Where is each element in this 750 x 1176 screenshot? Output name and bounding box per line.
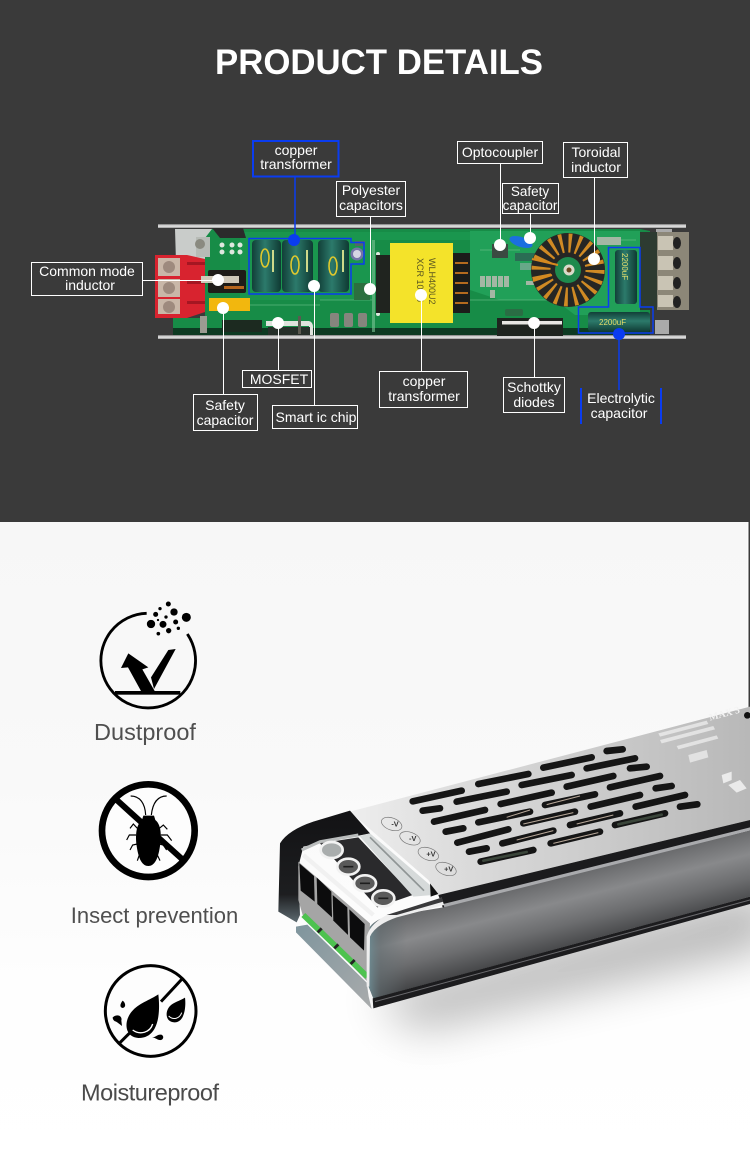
callout: optocoupler: Optocoupler [462,144,538,160]
product photo: power supply device [350,705,750,1028]
terminal end of device [278,811,444,1009]
common mode inductor part [201,270,246,293]
callout: polyester capacitors [336,182,406,295]
callout: safety capacitor bottom: Safety [205,397,245,413]
printed model text: MAX 3 [708,705,741,724]
ventilation slots [413,749,697,862]
callout: electrolytic capacitor: Electrolytic [587,390,655,406]
printed model text [658,705,747,793]
terminal screws [321,842,394,906]
side panel [367,831,750,998]
resistor row [480,237,621,298]
terminal block back [298,862,370,982]
callout: copper transformer bottom: transformer [388,388,460,404]
product photo: power supply device: -V [391,820,399,829]
electrolytic capacitors group [252,240,365,292]
callout: copper transformer top: transformer [260,156,332,172]
green circuit board edge [303,915,367,977]
side bottom lip [373,897,750,1008]
printed terminal marks [380,815,458,878]
yellow transformer core [376,243,470,323]
right output terminal [640,232,689,310]
callout: copper transformer top [253,141,338,246]
callout: toroidal inductor: Toroidal [571,144,621,160]
callout: schottky diodes: diodes [513,394,555,410]
callout: safety capacitor bottom [194,302,258,430]
yellow safety capacitor part [200,298,250,333]
end cover [278,811,370,922]
title: PRODUCT DETAILS [215,43,543,82]
vertical electrolytic capacitor: 2200uF [620,253,629,280]
horizontal electrolytic capacitor: 2200uF [599,318,626,327]
product photo: power supply device: +V [444,865,453,874]
callout: copper transformer bottom: copper [403,373,446,389]
callout: safety capacitor bottom: capacitor [197,412,254,428]
panel: features light background [0,522,750,1176]
callout: toroidal inductor [564,142,628,265]
circuit board photo [155,224,689,339]
callout: toroidal inductor: inductor [571,159,621,175]
callout: polyester capacitors: capacitors [339,197,403,213]
product photo: power supply device: +V [426,850,436,859]
front dark edge of top [438,820,750,909]
schottky diodes heat sink [497,309,563,336]
callout: copper transformer top: copper [275,142,318,158]
product photo: power supply device: -V [409,834,416,843]
yellow transformer core: XCR 10 05 [415,258,425,302]
top plate [350,707,750,895]
callout: safety capacitor top: Safety [511,184,549,199]
red input terminal [155,255,205,318]
icon: moistureproof [105,966,196,1056]
callout: copper transformer bottom [380,289,468,408]
callout: safety capacitor top: capacitor [503,198,558,213]
toroidal inductor core [531,233,605,307]
bottom plate [296,925,372,1009]
clear terminal cover [320,837,413,907]
callout: optocoupler [458,142,542,251]
callout: safety capacitor top [502,184,558,244]
terminal ribs [299,863,365,951]
callout: schottky diodes: Schottky [507,379,561,395]
callout: smart ic chip [272,280,358,428]
callout: electrolytic capacitor [580,328,662,424]
callout: common mode inductor: Common mode [39,263,135,279]
horizontal electrolytic capacitor [588,312,650,332]
lower heat sink and mosfet [266,316,313,335]
corner of top plate [430,883,438,897]
callout: smart ic chip: Smart ic chip [276,409,357,425]
callout: common mode inductor: inductor [65,277,115,293]
panel: product details dark background [0,0,750,522]
callout: electrolytic capacitor: capacitor [591,405,648,421]
blue highlight: output capacitors outline [578,248,653,333]
callout: mosfet: MOSFET [250,371,309,387]
icon: dustproof [101,601,196,708]
callout: polyester capacitors: Polyester [342,182,401,198]
optocoupler and blue capacitor parts [492,234,540,270]
label: dustproof: Dustproof [94,719,196,745]
callout: common mode inductor [32,262,224,296]
small chips row [330,313,367,327]
vertical electrolytic capacitor [615,250,637,304]
label: insect prevention: Insect prevention [71,903,238,928]
callout: mosfet [242,317,312,388]
blue highlight: capacitor group outline [249,238,364,294]
yellow transformer core: WLH400U2 [427,258,437,305]
chrome corner trim [367,898,444,987]
callout: schottky diodes [504,317,564,412]
label: moistureproof: Moistureproof [81,1080,219,1106]
icon: insect prevention [102,784,195,877]
